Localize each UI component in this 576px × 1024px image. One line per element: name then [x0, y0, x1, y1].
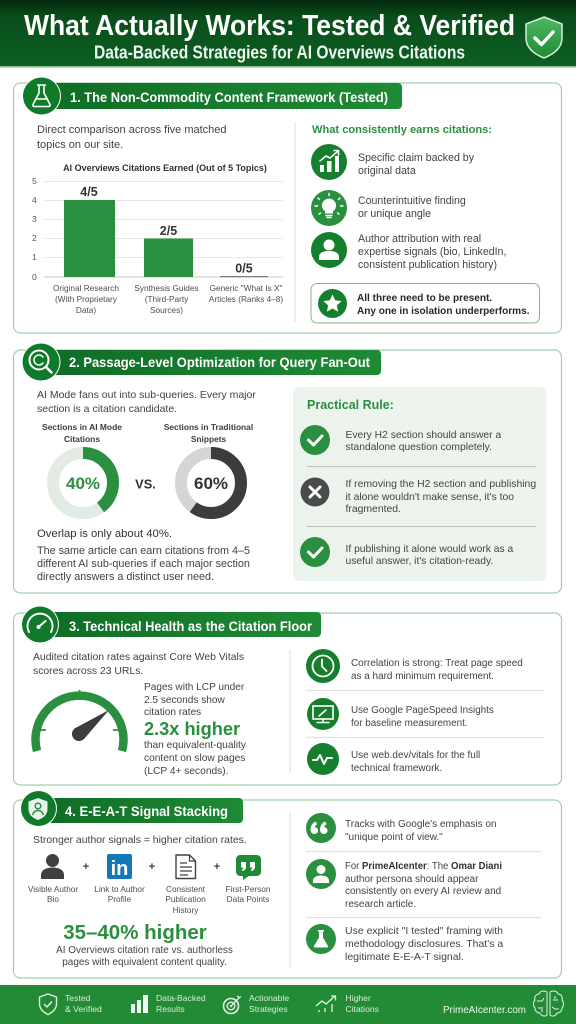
- intro text: AI Mode fans out into sub-queries. Every major: [37, 389, 256, 401]
- footer: site name: PrimeAIcenter.com: [443, 1005, 526, 1016]
- item: web vitals: Use web.dev/vitals for the full: [351, 750, 480, 761]
- icon: brain: [534, 991, 564, 1016]
- footer: tested and verified: [40, 993, 102, 1014]
- icon: first-person data points: Data Points: [227, 895, 269, 904]
- footer: higher citations: Higher: [346, 993, 371, 1003]
- item: I tested framing: legitimate E-E-A-T signal.: [345, 951, 464, 963]
- intro text: Audited citation rates against Core Web Vitals: [33, 652, 244, 663]
- footer: actionable strategies: Strategies: [249, 1004, 288, 1014]
- bar chart: citations earned: 2/5: [160, 224, 177, 238]
- heading: practical rule: Practical Rule:: [307, 398, 394, 412]
- stat: 2.3x higher: 2.3x higher: [144, 719, 240, 739]
- item: original data: original data: [358, 165, 416, 177]
- item: author attribution: [311, 232, 506, 271]
- item: web vitals: technical framework.: [351, 763, 442, 774]
- bar chart: citations earned: Sources): [150, 306, 183, 315]
- text: overlap: Overlap is only about 40%.: [37, 528, 172, 540]
- panel: 3 technical health: [14, 606, 562, 785]
- bar chart: citations earned: (Third-Party: [145, 295, 189, 304]
- rule: too fragmented: it alone wouldn't make sense, it's too: [346, 492, 514, 503]
- bar chart: citations earned: 0: [32, 272, 37, 282]
- bar chart: citations earned: Generic "What Is X": [210, 284, 282, 293]
- icon: first-person data points: [226, 855, 271, 904]
- icon: publication history document: Publication: [165, 895, 206, 904]
- bar chart: citations earned: Articles (Ranks 4–8): [209, 295, 283, 304]
- bar chart: citations earned: AI Overviews Citations Earned (Out of 5 Topics): [63, 163, 267, 173]
- footer: data-backed results: [131, 993, 206, 1014]
- icon: shield with check: [526, 17, 562, 58]
- donut: traditional snippets 60%: [164, 422, 253, 513]
- text: same article: directly answers a distinct user need.: [37, 571, 214, 583]
- item: correlation: [306, 649, 523, 683]
- icon: visible author bio: Visible Author: [28, 885, 78, 894]
- footer: data-backed results: Results: [156, 1004, 185, 1014]
- footer: actionable strategies: Actionable: [249, 993, 289, 1003]
- icon: publication history document: Consistent: [166, 885, 205, 894]
- stat: 2.3x higher: (LCP 4+ seconds).: [144, 766, 228, 777]
- section 1 heading: 1. The Non-Commodity Content Framework (Tested): [70, 89, 388, 105]
- item: I tested framing: Use explicit "I tested" framing with: [345, 925, 503, 937]
- callout: all three needed: Any one in isolation underperforms.: [357, 306, 530, 317]
- bar chart: citations earned: 3: [32, 214, 37, 224]
- item: correlation: Correlation is strong: Treat page speed: [351, 658, 523, 669]
- callout: all three needed: All three need to be present.: [357, 293, 492, 304]
- text: same article: different AI sub-queries if each major section: [37, 558, 250, 570]
- rule: citation-ready: useful answer, it's citation-ready.: [346, 556, 493, 567]
- item: original data: Specific claim backed by: [358, 152, 474, 164]
- rule: too fragmented: fragmented.: [346, 504, 401, 515]
- item: unique point of view: [306, 813, 497, 843]
- stat: 2.3x higher: 2.5 seconds show: [144, 695, 226, 706]
- label: versus: VS.: [135, 476, 156, 492]
- rule: citation-ready: [300, 537, 513, 567]
- icon: publication history document: History: [173, 906, 199, 915]
- rule: standalone question: [300, 425, 501, 455]
- item: original data: [311, 144, 475, 180]
- bar chart: citations earned: 0/5: [235, 262, 253, 276]
- rule: standalone question: standalone question completely.: [346, 442, 492, 453]
- panel: 2 passage-level optimization: [14, 342, 562, 593]
- item: author attribution: consistent publication history): [358, 259, 497, 271]
- footer: actionable strategies: [224, 993, 289, 1014]
- donut: AI mode citations 40%: Sections in AI Mode: [42, 422, 122, 432]
- bar chart: citations earned: Synthesis Guides: [134, 284, 199, 293]
- stat: 2.3x higher: citation rates: [144, 707, 201, 718]
- header banner: [0, 0, 576, 68]
- intro text: topics on our site.: [37, 139, 123, 151]
- item: correlation: as a hard minimum requirement.: [351, 671, 494, 682]
- item: counterintuitive finding: or unique angle: [358, 208, 431, 220]
- intro text: Stronger author signals = higher citation rates.: [33, 835, 247, 846]
- section 1 heading: [22, 76, 402, 116]
- icon: first-person data points: First-Person: [226, 885, 270, 894]
- plus: +: [149, 861, 155, 873]
- panel: practical rule: [293, 387, 546, 581]
- gauge: [35, 690, 124, 751]
- item: author attribution: expertise signals (bio, LinkedIn,: [358, 246, 506, 258]
- item: author persona: For PrimeAIcenter: The Omar Diani: [345, 861, 502, 872]
- callout: all three needed: [311, 284, 540, 323]
- icon: visible author bio: [28, 854, 78, 904]
- item: author persona: [306, 859, 502, 910]
- donut: traditional snippets 60%: Sections in Traditional: [164, 422, 253, 432]
- footer bar: [0, 985, 576, 1024]
- item: pagespeed insights: for baseline measurement.: [351, 718, 468, 729]
- section 2 heading: 2. Passage-Level Optimization for Query Fan-Out: [69, 354, 370, 370]
- bar chart: citations earned: 5: [32, 176, 37, 186]
- rule: too fragmented: [300, 478, 536, 515]
- icon: linkedin profile link: Profile: [108, 895, 132, 904]
- plus: +: [83, 861, 89, 873]
- text: same article: The same article can earn citations from 4–5: [37, 545, 250, 557]
- stat: 2.3x higher: Pages with LCP under: [144, 682, 244, 693]
- section 2 heading: [22, 342, 381, 382]
- bar chart: citations earned: Original Research: [53, 284, 119, 293]
- bar chart: citations earned: 4: [32, 195, 37, 205]
- footer: tested and verified: Tested: [65, 993, 90, 1003]
- item: counterintuitive finding: [311, 190, 466, 226]
- item: author persona: research article.: [345, 899, 416, 910]
- item: pagespeed insights: Use Google PageSpeed Insights: [351, 705, 494, 716]
- donut: traditional snippets 60%: 60%: [194, 474, 228, 493]
- subtitle: Data-Backed Strategies for AI Overviews Citations: [94, 42, 465, 62]
- icon: visible author bio: Bio: [47, 895, 59, 904]
- intro text: scores across 23 URLs.: [33, 666, 143, 677]
- item: author persona: author persona should appear: [345, 874, 478, 885]
- stat: 2.3x higher: than equivalent-quality: [144, 740, 246, 751]
- section 3 heading: 3. Technical Health as the Citation Floor: [69, 618, 312, 634]
- bar chart: citations earned: 2: [32, 233, 37, 243]
- plus: +: [214, 861, 220, 873]
- rule: standalone question: Every H2 section should answer a: [346, 430, 501, 441]
- stat: 35-40% higher: pages with equivalent content quality.: [62, 957, 227, 968]
- bar chart: citations earned: 1: [32, 252, 37, 262]
- rule: citation-ready: If publishing it alone would work as a: [346, 544, 513, 555]
- item: counterintuitive finding: Counterintuitive finding: [358, 195, 466, 207]
- footer: tested and verified: & Verified: [65, 1004, 102, 1014]
- icon: linkedin profile link: in: [111, 858, 128, 880]
- donut: AI mode citations 40%: [42, 422, 122, 513]
- rule: too fragmented: If removing the H2 section and publishing: [346, 479, 536, 490]
- icon: publication history document: [165, 855, 206, 915]
- intro text: section is a citation candidate.: [37, 403, 177, 415]
- donut: AI mode citations 40%: 40%: [66, 474, 100, 493]
- footer: higher citations: Citations: [346, 1004, 379, 1014]
- title: What Actually Works: Tested & Verified: [24, 10, 515, 42]
- item: web vitals: [307, 743, 480, 775]
- item: unique point of view: Tracks with Google's emphasis on: [345, 819, 497, 830]
- intro text: Direct comparison across five matched: [37, 124, 227, 136]
- stat: 35-40% higher: AI Overviews citation rate vs. authorless: [56, 945, 233, 956]
- bar chart: citations earned: 4/5: [80, 185, 98, 199]
- icon: linkedin profile link: [94, 854, 145, 904]
- panel: 1 non-commodity content framework: [14, 76, 562, 333]
- bar chart: citations earned: Data): [76, 306, 96, 315]
- heading: what earns citations: What consistently earns citations:: [312, 124, 492, 136]
- item: unique point of view: "unique point of view.": [345, 832, 443, 843]
- item: author attribution: Author attribution with real: [358, 233, 481, 245]
- item: I tested framing: [306, 924, 503, 963]
- bar chart: citations earned: (With Proprietary: [55, 295, 118, 304]
- section 3 heading: [21, 606, 321, 644]
- stat: 35-40% higher: 35–40% higher: [63, 921, 207, 944]
- panel: 4 E-E-A-T signal stacking: [14, 790, 562, 978]
- stat: 2.3x higher: [144, 682, 247, 777]
- bar chart: citations earned: [32, 163, 283, 315]
- item: author persona: consistently on every AI review and: [345, 886, 501, 897]
- stat: 35-40% higher: [56, 921, 233, 968]
- section 4 heading: [20, 790, 243, 827]
- donut: AI mode citations 40%: Citations: [64, 434, 100, 444]
- stat: 2.3x higher: content on slow pages: [144, 753, 245, 764]
- donut: traditional snippets 60%: Snippets: [191, 434, 227, 444]
- footer: data-backed results: Data-Backed: [156, 993, 206, 1003]
- section 4 heading: 4. E-E-A-T Signal Stacking: [65, 803, 228, 819]
- footer: higher citations: [316, 993, 379, 1014]
- item: pagespeed insights: [307, 698, 494, 730]
- item: I tested framing: methodology disclosures. That's a: [345, 938, 503, 950]
- icon: linkedin profile link: Link to Author: [94, 885, 145, 894]
